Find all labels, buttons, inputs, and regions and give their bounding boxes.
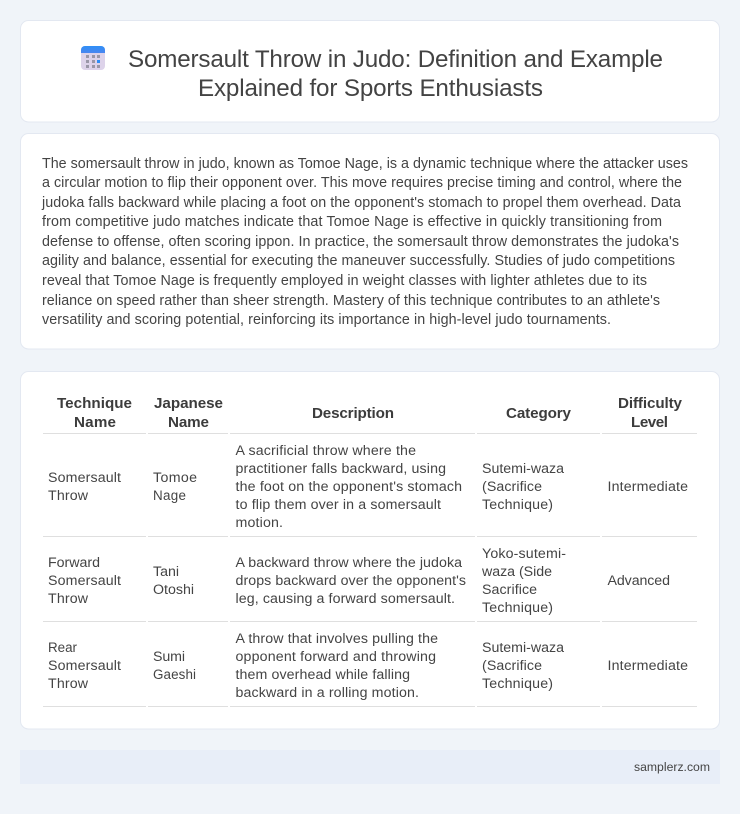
table header row <box>57 395 683 431</box>
table row: Rear Somersault Throw: opponent forward and throwing <box>236 649 436 665</box>
table row: Somersault Throw: Throw <box>48 488 89 504</box>
table row: Rear Somersault Throw: Rear <box>48 640 78 655</box>
table header row: Japanese <box>154 395 223 412</box>
table row: Forward Somersault Throw: Advanced <box>608 573 670 589</box>
title: Explained for Sports Enthusiasts <box>198 75 543 102</box>
intro text block: versatility and scoring potential, reinforcing its importance in high-level judo tournaments. <box>42 312 611 328</box>
table row: Forward Somersault Throw: Forward <box>48 555 100 571</box>
intro text block: reliance on speed rather than sheer strength. Mastery of this technique contributes to an athlete's <box>42 293 660 309</box>
table row: Forward Somersault Throw: Technique) <box>482 600 553 616</box>
table row: Somersault Throw: Technique) <box>482 497 553 513</box>
table header row: Category <box>506 405 572 422</box>
intro text block <box>41 156 688 328</box>
icon: calendar <box>81 46 105 70</box>
table row: Rear Somersault Throw: Technique) <box>482 676 553 692</box>
table header row: Name <box>74 414 116 431</box>
table row: Rear Somersault Throw: Throw <box>48 676 89 692</box>
table row: Forward Somersault Throw: Sacrifice <box>482 582 537 598</box>
table row: Somersault Throw: Intermediate <box>608 479 688 495</box>
table row: Forward Somersault Throw <box>48 546 670 616</box>
table row: Somersault Throw: motion. <box>236 515 283 531</box>
table header row: Name <box>168 414 209 431</box>
footer: samplerz.com <box>634 760 710 774</box>
intro text block: The somersault throw in judo, known as Tomoe Nage, is a dynamic technique where the attacker uses <box>42 156 688 172</box>
table row: Somersault Throw: to flip them over in a somersault <box>236 497 441 513</box>
table row: Rear Somersault Throw: Sutemi-waza <box>482 640 564 656</box>
intro text block: defense to offense, often scoring ippon. In practice, the somersault throw demonstrates the judoka's <box>42 234 679 250</box>
table row: Somersault Throw: Nage <box>153 488 186 503</box>
intro text block: from competitive judo matches indicate that Tomoe Nage is effective in quickly transitioning from <box>42 214 662 230</box>
intro text block: judoka falls backward while placing a foot on the opponent's stomach to propel them overhead. Data <box>41 195 681 211</box>
table row: Forward Somersault Throw: Somersault <box>48 573 121 589</box>
table row: Somersault Throw: (Sacrifice <box>482 479 542 495</box>
table row: Forward Somersault Throw: Throw <box>48 591 89 607</box>
table row: Rear Somersault Throw: backward in a rolling motion. <box>236 685 419 701</box>
table row: Somersault Throw: Tomoe <box>153 470 197 486</box>
table header row: Description <box>312 405 394 422</box>
table row: Somersault Throw: the foot on the opponent's stomach <box>236 479 462 495</box>
table row: Rear Somersault Throw: Intermediate <box>608 658 688 674</box>
table row: Forward Somersault Throw: Otoshi <box>153 582 194 598</box>
table row: Rear Somersault Throw: (Sacrifice <box>482 658 542 674</box>
panel: intro paragraph <box>20 134 720 349</box>
title: Somersault Throw in Judo: Definition and Example <box>128 46 663 73</box>
title <box>128 46 663 102</box>
table row: Forward Somersault Throw: Tani <box>153 564 179 580</box>
intro text block: a circular motion to flip their opponent over. This move requires precise timing and control, where the <box>42 175 682 191</box>
table header row: Difficulty <box>618 395 683 412</box>
table row: Rear Somersault Throw: them overhead while falling <box>236 667 410 683</box>
table row: Forward Somersault Throw: Yoko-sutemi- <box>482 546 566 562</box>
table row: Forward Somersault Throw: waza (Side <box>481 564 552 580</box>
table row: Rear Somersault Throw: Gaeshi <box>153 667 196 682</box>
table row: Rear Somersault Throw: Somersault <box>48 658 121 674</box>
table row: Somersault Throw: practitioner falls backward, using <box>236 461 446 477</box>
footer <box>20 750 720 784</box>
table row: Somersault Throw <box>48 443 688 531</box>
table row: Forward Somersault Throw: leg, causing a forward somersault. <box>236 591 455 607</box>
table row: Rear Somersault Throw: Sumi <box>153 649 185 665</box>
intro text block: reveal that Tomoe Nage is frequently employed in weight classes with lighter athletes due to its <box>42 273 647 289</box>
table row: Forward Somersault Throw: drops backward over the opponent's <box>236 573 466 589</box>
panel: techniques table <box>20 372 720 729</box>
table header row: Level <box>631 414 668 431</box>
table row: Somersault Throw: A sacrificial throw where the <box>236 443 416 459</box>
table row: Rear Somersault Throw <box>48 631 688 701</box>
table row: Forward Somersault Throw: A backward throw where the judoka <box>236 555 462 571</box>
table row: Somersault Throw: Sutemi-waza <box>482 461 564 477</box>
intro text block: agility and balance, essential for executing the maneuver successfully. Studies of judo competitions <box>42 253 675 269</box>
table header row: Technique <box>57 395 132 412</box>
table row: Rear Somersault Throw: A throw that involves pulling the <box>236 631 438 647</box>
header panel <box>20 20 720 122</box>
table row: Somersault Throw: Somersault <box>48 470 121 486</box>
